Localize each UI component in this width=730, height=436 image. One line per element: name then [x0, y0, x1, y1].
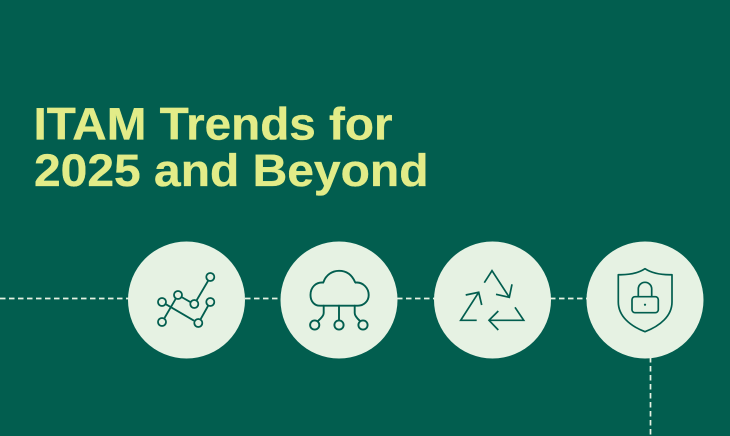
dashed connector — [0, 298, 650, 436]
title: 2025 and Beyond — [34, 145, 428, 196]
icon: recycle arrows — [434, 242, 551, 358]
title: ITAM Trends for — [34, 98, 392, 150]
icon: cloud network — [280, 242, 398, 358]
icon: analytics chart — [128, 242, 245, 358]
icon: security shield with padlock — [586, 242, 704, 358]
title — [34, 98, 428, 196]
